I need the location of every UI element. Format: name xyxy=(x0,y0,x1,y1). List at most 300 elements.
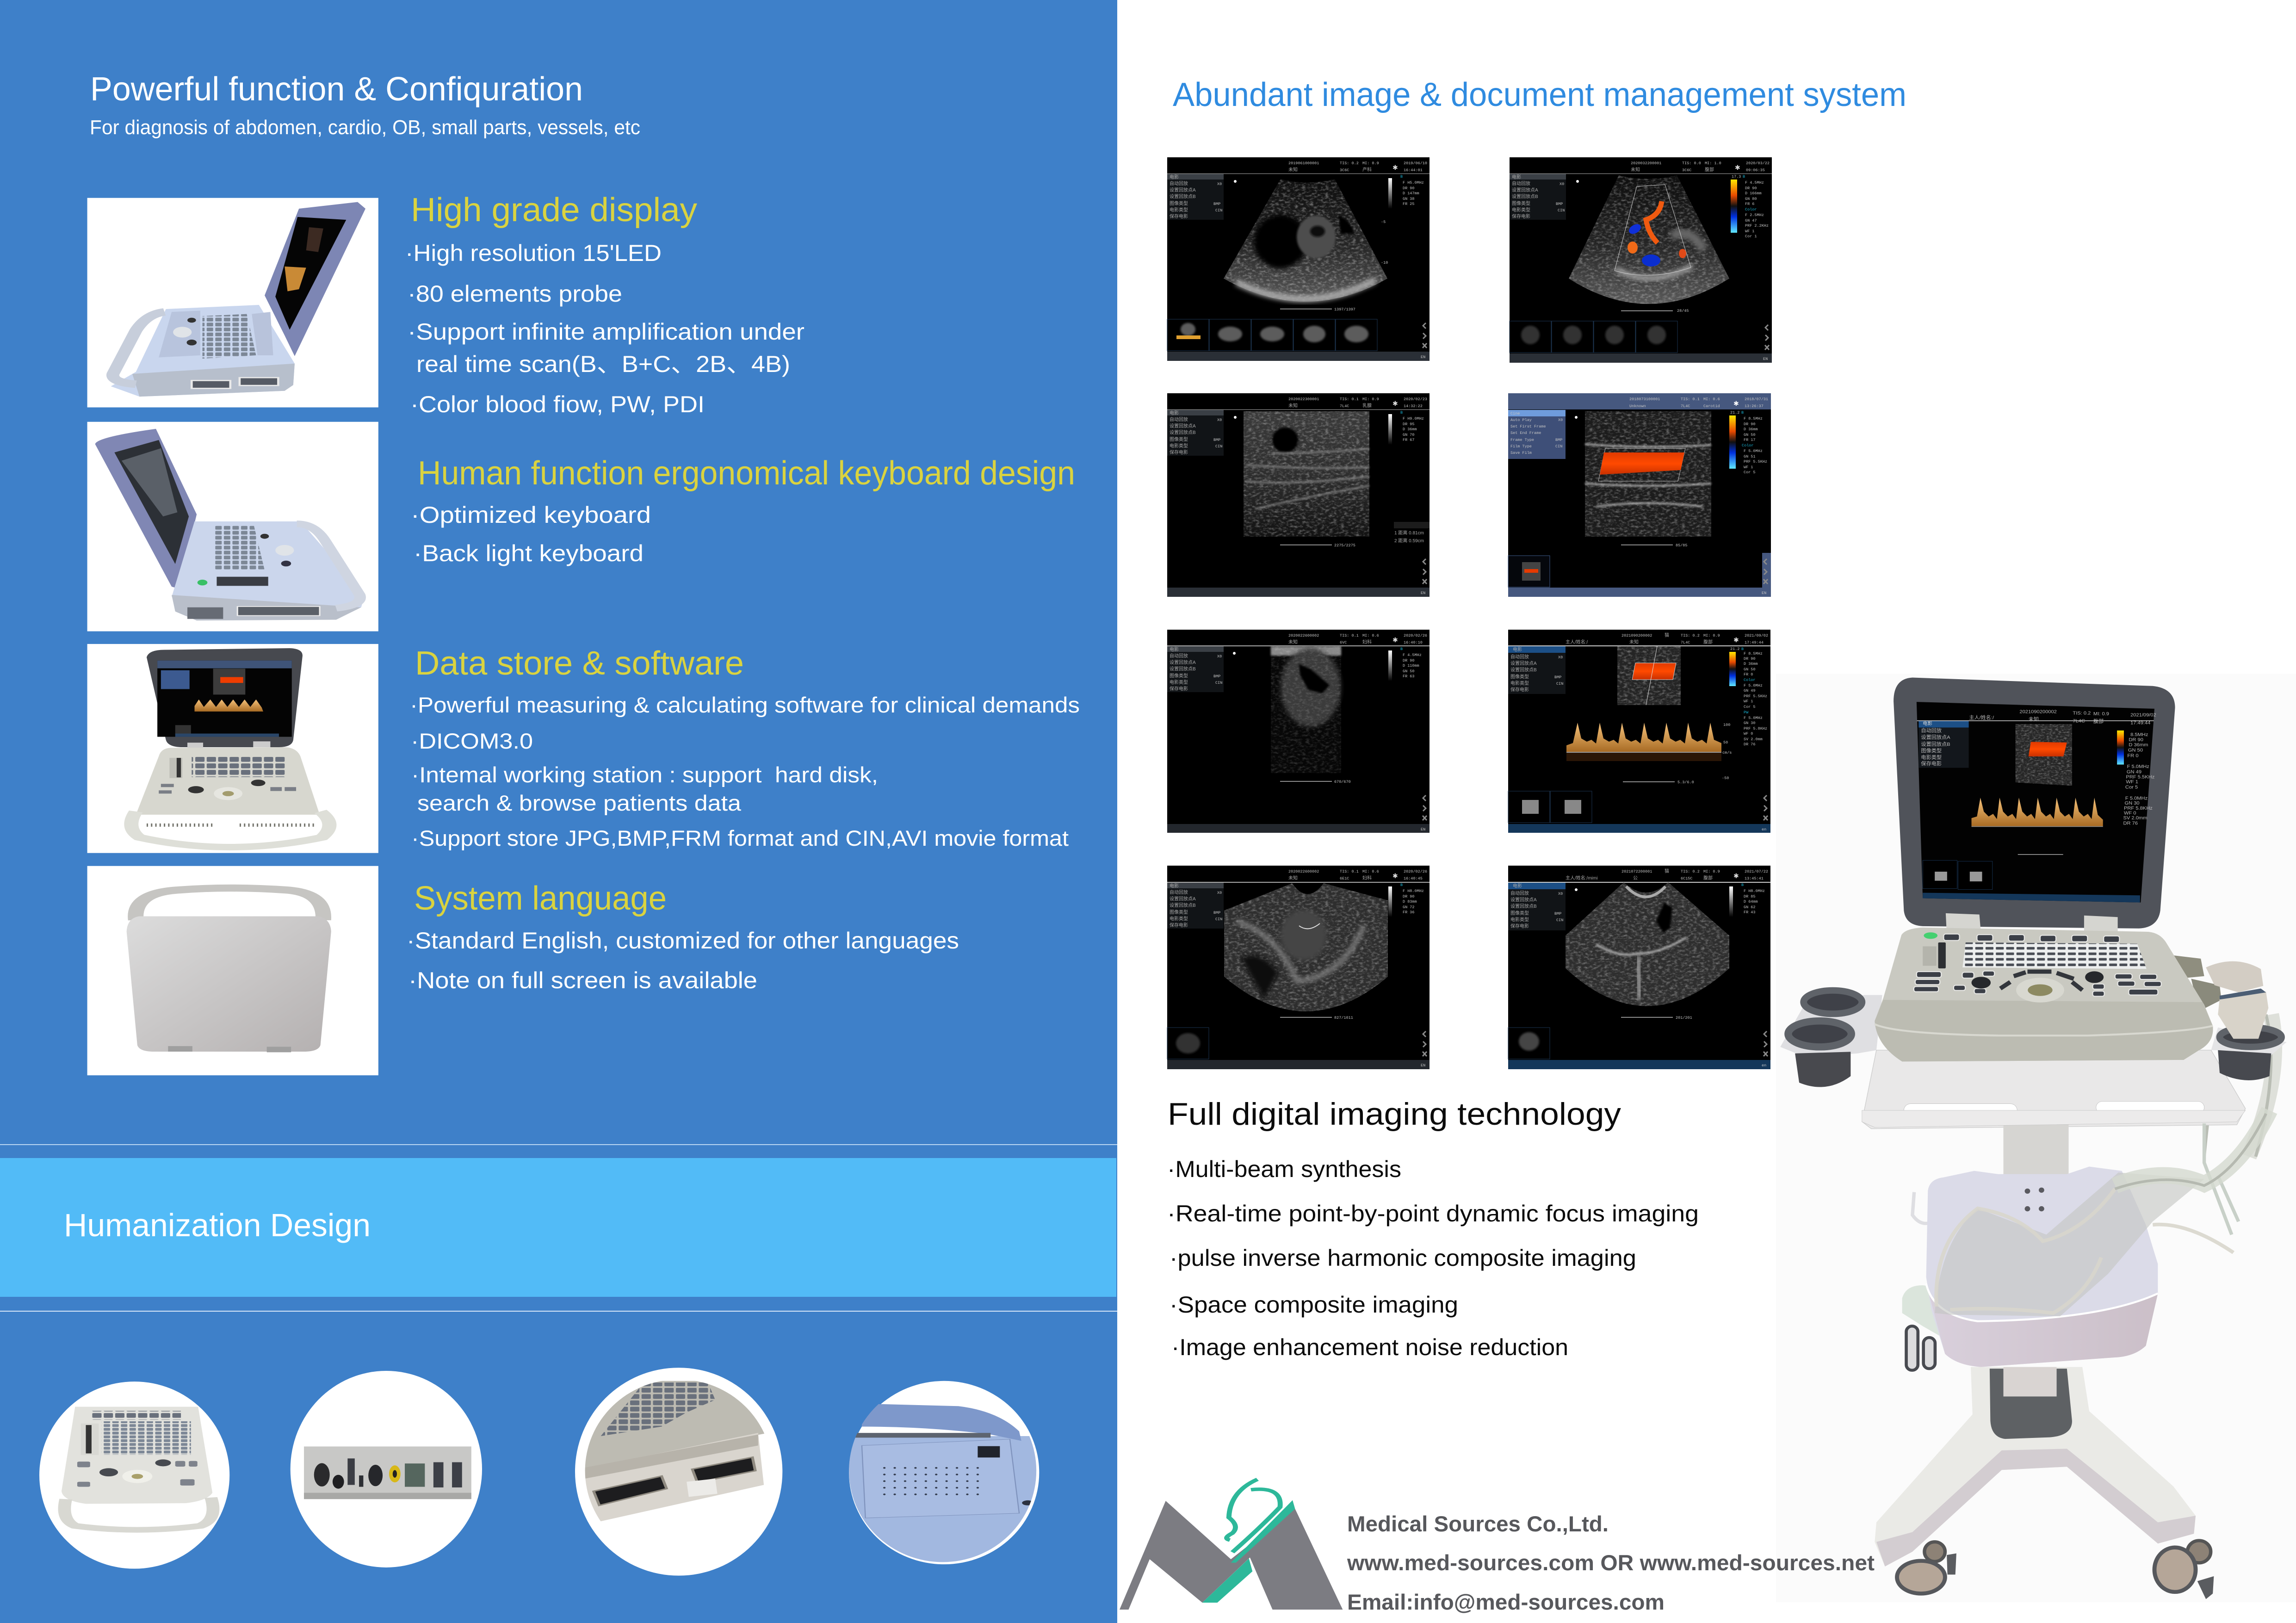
screenshot E: cyst linear: 16:40:10 xyxy=(1404,640,1423,645)
screenshot H: endocavity veterinary: BMP xyxy=(1554,911,1561,916)
screenshot B: colour doppler abdominal: Cor 1 xyxy=(1745,234,1757,239)
screenshot F: spectral doppler: BMP xyxy=(1554,675,1561,680)
screenshot C: breast linear: TIS: 0.1 xyxy=(1340,397,1359,402)
screenshot E: cyst linear xyxy=(1167,630,1430,833)
text block: imaging technology bullets: ·Real-time point-by-point dynamic focus imaging xyxy=(1167,1201,1699,1227)
screenshot C: breast linear: 1 距离 0.81cm xyxy=(1394,530,1424,536)
text block: imaging technology bullets xyxy=(1167,1156,1699,1360)
right probe cables xyxy=(2249,1015,2274,1157)
screenshot D: carotid colour: Cine xyxy=(1510,411,1520,416)
screenshot B: colour doppler abdominal: 3C6C xyxy=(1682,168,1691,173)
screenshot F: spectral doppler: B xyxy=(1741,647,1744,651)
screenshot D: carotid colour: BMP xyxy=(1555,438,1562,442)
screenshot D: carotid colour: Film Type xyxy=(1510,444,1532,449)
screenshot A: obstetric: 1397/1397 xyxy=(1334,307,1355,312)
screenshot G: endocavity: 2020022600002 xyxy=(1288,869,1319,874)
screenshot A: obstetric: 2019061000001 xyxy=(1288,161,1319,166)
screen xyxy=(1917,702,2154,903)
screenshot D: carotid colour: TIS: 0.1 xyxy=(1681,397,1700,402)
feet xyxy=(168,1046,192,1052)
screenshot H: endocavity veterinary: 猫 xyxy=(1665,868,1669,874)
screenshot D: carotid colour: Color xyxy=(1742,443,1754,448)
screenshot E: cyst linear: 设置回放点B xyxy=(1170,666,1196,672)
screenshot F: spectral doppler: cm/s xyxy=(1722,750,1732,755)
screenshot B: colour doppler abdominal: MI: 1.0 xyxy=(1705,161,1721,166)
trolley upper: monitor, console, holders, tray: 设置回放点A xyxy=(1921,734,1950,740)
rear wheels xyxy=(1925,1542,1945,1561)
trolley upper: monitor, console, holders, tray: PRF 5.8KHz xyxy=(2124,805,2153,811)
screenshot D: carotid colour: 21.2 xyxy=(1730,410,1739,415)
screenshot A: obstetric: B xyxy=(1400,174,1403,179)
screenshot H: endocavity veterinary: D 64mm xyxy=(1744,899,1758,904)
screenshot F: spectral doppler: 主人/姓名:/ xyxy=(1566,639,1588,645)
screenshot F: spectral doppler: DR 76 xyxy=(1744,742,1756,747)
screenshot E: cyst linear: 电影 xyxy=(1170,646,1179,652)
screenshot F: spectral doppler: -50 xyxy=(1722,776,1729,781)
screenshot H: endocavity veterinary: 电影类型 xyxy=(1510,917,1529,923)
panel: left blue column xyxy=(0,0,1117,1623)
monitor xyxy=(147,648,303,747)
company contact text: www.med-sources.com OR www.med-sources.net xyxy=(1347,1550,1875,1575)
trolley upper: monitor, console, holders, tray: 腹部 xyxy=(2093,718,2104,725)
knobs and trackball xyxy=(1972,977,1991,989)
screenshot C: breast linear: 乳腺 xyxy=(1362,403,1372,409)
rear cable frame xyxy=(2204,1123,2239,1235)
screenshot D: carotid colour: CIN xyxy=(1555,444,1562,449)
screenshot F: spectral doppler: PRF 5.5KHz xyxy=(1744,694,1767,699)
screenshot F: spectral doppler: 未知 xyxy=(1629,639,1639,645)
screenshot G: endocavity: 6E1C xyxy=(1340,876,1349,881)
screenshot F: spectral doppler: 17:49:44 xyxy=(1745,640,1764,645)
screenshot B: colour doppler abdominal: TIS: 0.0 xyxy=(1682,161,1701,166)
screenshot C: breast linear: 2275/2275 xyxy=(1334,543,1355,548)
gel cup right xyxy=(2218,1050,2271,1080)
screenshot G: endocavity: DR 90 xyxy=(1403,894,1415,899)
tray xyxy=(1862,1050,2246,1129)
screenshot A: obstetric xyxy=(1167,157,1430,361)
screenshot F: spectral doppler: 图像类型 xyxy=(1510,674,1529,680)
panel: ultrasound screenshots grid xyxy=(1167,157,1772,1069)
screenshot H: endocavity veterinary: 13:45:41 xyxy=(1745,876,1764,881)
screenshot D: carotid colour: GN 50 xyxy=(1744,433,1756,437)
screenshot F: spectral doppler: 2021090200002 xyxy=(1621,633,1652,638)
screenshot D: carotid colour: 13:26:37 xyxy=(1745,404,1764,409)
screenshot F: spectral doppler: TIS: 0.2 xyxy=(1681,633,1700,638)
screenshot E: cyst linear: DR 90 xyxy=(1403,658,1415,663)
screenshot C: breast linear: EN xyxy=(1421,591,1425,595)
screenshot F: spectral doppler: WF 0 xyxy=(1744,731,1753,736)
screenshot E: cyst linear: BMP xyxy=(1213,674,1220,679)
screenshot A: obstetric: -10 xyxy=(1381,260,1388,265)
screenshot D: carotid colour: Auto Play xyxy=(1510,418,1532,422)
trolley upper: monitor, console, holders, tray: PRF 5.5KHz xyxy=(2126,774,2154,780)
heading: High grade display: High grade display xyxy=(411,192,697,229)
screenshot B: colour doppler abdominal: 腹部 xyxy=(1705,167,1714,173)
screenshot D: carotid colour: Unknown xyxy=(1629,404,1646,409)
screenshot C: breast linear: 图像类型 xyxy=(1170,436,1188,442)
screenshot F: spectral doppler: MI: 0.9 xyxy=(1703,633,1720,638)
heading: Data store & software: Data store & software xyxy=(415,645,744,682)
screenshot E: cyst linear: D 110mm xyxy=(1403,663,1419,668)
screenshot A: obstetric: GN 38 xyxy=(1403,197,1415,201)
screenshot H: endocavity veterinary: 主人/姓名:/mimi xyxy=(1566,875,1597,881)
screenshot F: spectral doppler: 50 xyxy=(1723,740,1728,745)
trolley upper: monitor, console, holders, tray: Cor 5 xyxy=(2125,785,2138,790)
base xyxy=(111,305,295,396)
connectors xyxy=(2173,955,2204,978)
screenshot C: breast linear: MI: 0.9 xyxy=(1362,397,1379,402)
screenshot G: endocavity: ✱ xyxy=(1392,872,1398,880)
screen lid xyxy=(265,202,365,356)
connector ports xyxy=(192,380,230,388)
sliders xyxy=(1923,946,1937,966)
screenshot C: breast linear: 电影类型 xyxy=(1170,443,1188,449)
screenshot E: cyst linear: 670/670 xyxy=(1334,780,1351,784)
cables in plastic wrap xyxy=(1936,1189,2234,1313)
screenshot F: spectral doppler: 2021/09/02 xyxy=(1745,633,1768,638)
trolley upper: monitor, console, holders, tray: SV 2.0mm xyxy=(2123,815,2147,821)
screenshot A: obstetric: 电影类型 xyxy=(1170,207,1188,213)
screenshot H: endocavity veterinary: CIN xyxy=(1556,918,1563,923)
screenshot G: endocavity: MI: 0.6 xyxy=(1362,869,1379,874)
tray underside xyxy=(1862,1110,2246,1127)
screenshot C: breast linear: 自动回放 xyxy=(1170,416,1188,422)
screenshot H: endocavity veterinary: 腹部 xyxy=(1703,875,1713,881)
text block: data bullets: ·Powerful measuring & calculating software for clinical demands xyxy=(410,693,1080,717)
detail photo: rear port panel circle xyxy=(291,1371,482,1567)
trolley upper: monitor, console, holders, tray: 设置回放点B xyxy=(1921,741,1950,747)
screenshot F: spectral doppler: F 5.0MHz xyxy=(1744,683,1763,688)
screenshot A: obstetric: DR 90 xyxy=(1403,186,1415,191)
screenshot G: endocavity xyxy=(1167,866,1430,1069)
screenshot H: endocavity veterinary: 2021072200001 xyxy=(1621,869,1652,874)
screenshot B: colour doppler abdominal: 28/45 xyxy=(1677,309,1689,313)
screenshot F: spectral doppler: X0 xyxy=(1558,655,1563,660)
screenshot G: endocavity: B xyxy=(1400,883,1403,887)
screen lid xyxy=(95,429,197,589)
handle xyxy=(136,888,323,920)
screenshot F: spectral doppler: 设置回放点A xyxy=(1510,660,1537,666)
detail photo: back panel circle xyxy=(848,1381,1040,1565)
detail photo: keyboard circle xyxy=(39,1381,229,1569)
screenshot F: spectral doppler: PRF 5.8KHz xyxy=(1744,726,1767,731)
screenshot B: colour doppler abdominal: 电影类型 xyxy=(1512,207,1530,213)
product photo 2: open laptop ultrasound, opposite side xyxy=(87,422,378,632)
screenshot A: obstetric: F H5.0MHz xyxy=(1403,180,1424,185)
screenshot D: carotid colour: Set End Frame xyxy=(1510,431,1541,435)
text block: data bullets: ·DICOM3.0 xyxy=(411,729,533,753)
handle xyxy=(297,524,360,608)
screenshot G: endocavity: 设置回放点A xyxy=(1170,896,1196,902)
text block: display bullets: ·Support infinite amplification under xyxy=(408,319,805,345)
screenshot F: spectral doppler: GN 49 xyxy=(1744,688,1756,693)
screenshot A: obstetric: 产科 xyxy=(1362,167,1372,173)
hook xyxy=(1912,1192,1928,1223)
text block: keyboard bullets xyxy=(411,502,651,566)
screenshot D: carotid colour: Carotid xyxy=(1703,404,1720,409)
trolley upper: monitor, console, holders, tray: 自动回放 xyxy=(1921,727,1942,733)
screenshot G: endocavity: 设置回放点B xyxy=(1170,902,1196,908)
screenshot F: spectral doppler: en xyxy=(1762,827,1766,832)
screenshot E: cyst linear: X0 xyxy=(1217,654,1222,659)
screenshot F: spectral doppler: Cor 5 xyxy=(1744,705,1756,709)
screenshot D: carotid colour: FR 17 xyxy=(1744,438,1756,442)
heading: System language: System language xyxy=(414,880,667,917)
column xyxy=(2004,1128,2069,1157)
screenshot E: cyst linear: 图像类型 xyxy=(1170,673,1188,679)
screenshot F: spectral doppler: 电影类型 xyxy=(1510,680,1529,686)
screenshot A: obstetric: 设置回放点A xyxy=(1170,187,1196,193)
screenshot B: colour doppler abdominal: D 166mm xyxy=(1745,191,1762,196)
screenshot A: obstetric: 图像类型 xyxy=(1170,200,1188,206)
screenshot B: colour doppler abdominal: GN 47 xyxy=(1745,218,1757,223)
screenshot G: endocavity: 电影类型 xyxy=(1170,916,1188,922)
trolley upper: monitor, console, holders, tray: WF 0 xyxy=(2124,811,2136,816)
screenshot G: endocavity: 保存电影 xyxy=(1170,922,1188,928)
text block: data bullets: ·Support store JPG,BMP,FRM format and CIN,AVI movie format xyxy=(411,826,1069,850)
screenshot G: endocavity: FR 36 xyxy=(1403,910,1415,915)
screenshot H: endocavity veterinary: F H8.0MHz xyxy=(1744,889,1765,893)
screenshot F: spectral doppler: WF 1 xyxy=(1744,699,1753,704)
screenshot F: spectral doppler: CIN xyxy=(1556,681,1563,686)
screenshot F: spectral doppler: 100 xyxy=(1723,723,1730,727)
screenshot C: breast linear: ✱ xyxy=(1392,400,1398,407)
screenshot D: carotid colour: 2018/07/31 xyxy=(1745,397,1768,402)
screenshot E: cyst linear: 保存电影 xyxy=(1170,686,1188,692)
trolley upper: monitor, console, holders, tray: 保存电影 xyxy=(1921,760,1942,767)
trolley upper: monitor, console, holders, tray: GN 50 xyxy=(2128,748,2143,753)
trolley upper: monitor, console, holders, tray: 7L4C xyxy=(2073,719,2085,724)
foot rest and caster xyxy=(1902,1285,1940,1336)
screenshot F: spectral doppler: D 36mm xyxy=(1744,662,1758,666)
screenshot G: endocavity: 电影 xyxy=(1170,883,1179,889)
screenshot F: spectral doppler: 设置回放点B xyxy=(1510,667,1537,673)
screenshot F: spectral doppler: PW xyxy=(1744,710,1749,715)
screenshot B: colour doppler abdominal: 2020032200001 xyxy=(1631,161,1661,166)
subtitle: For diagnosis of abdomen, cardio, OB, small parts, vessels, etc xyxy=(90,116,640,139)
banner: Humanization Design: Humanization Design xyxy=(64,1207,371,1243)
text block: language bullets: ·Note on full screen is available xyxy=(408,967,757,993)
screenshot D: carotid colour: 2018073100001 xyxy=(1629,397,1660,402)
screenshot B: colour doppler abdominal: X0 xyxy=(1560,182,1564,186)
trolley upper: monitor, console, holders, tray: MI: 0.9 xyxy=(2093,711,2109,717)
screenshot D: carotid colour xyxy=(1508,393,1771,597)
base xyxy=(172,521,365,607)
screenshot B: colour doppler abdominal: 图像类型 xyxy=(1512,200,1530,206)
trolley upper: monitor, console, holders, tray: WF 1 xyxy=(2126,779,2138,785)
screenshot E: cyst linear: FR 63 xyxy=(1403,674,1415,679)
product photo 3: front view with screen xyxy=(87,644,378,853)
screenshot F: spectral doppler xyxy=(1508,630,1770,833)
screenshot H: endocavity veterinary: 201/201 xyxy=(1676,1016,1692,1020)
screenshot B: colour doppler abdominal: 09:06:35 xyxy=(1746,168,1765,173)
screenshot E: cyst linear: B xyxy=(1400,647,1403,651)
screenshot B: colour doppler abdominal: Color xyxy=(1745,207,1757,212)
screenshot G: endocavity: 未知 xyxy=(1288,875,1298,881)
screenshot D: carotid colour: F 8.5MHz xyxy=(1744,416,1763,421)
screenshot E: cyst linear: MI: 0.6 xyxy=(1362,633,1379,638)
screenshot G: endocavity: X0 xyxy=(1217,891,1222,895)
screenshot D: carotid colour: Frame Type xyxy=(1510,438,1534,442)
screenshot F: spectral doppler: F 5.0MHz xyxy=(1744,716,1763,720)
screenshot A: obstetric: MI: 0.9 xyxy=(1362,161,1379,166)
screenshot G: endocavity: 2020/02/26 xyxy=(1404,869,1427,874)
connector left xyxy=(594,1476,667,1505)
screenshot C: breast linear: D 36mm xyxy=(1403,427,1417,432)
trolley upper: monitor, console, holders, tray: 电影 xyxy=(1923,720,1932,726)
trolley upper: monitor, console, holders, tray: D 36mm xyxy=(2129,743,2148,748)
screenshot H: endocavity veterinary: en xyxy=(1762,1063,1766,1068)
screenshot B: colour doppler abdominal: 17.3 xyxy=(1732,174,1741,179)
screenshot A: obstetric: 电影 xyxy=(1170,174,1179,180)
speaker panel xyxy=(862,1439,1019,1518)
screenshot E: cyst linear: EN xyxy=(1421,827,1425,832)
heading: Human function ergonomical keyboard design: Human function ergonomical keyboard design xyxy=(418,455,1075,492)
screenshot E: cyst linear: F 4.5MHz xyxy=(1403,653,1422,657)
screenshot D: carotid colour: 7L4C xyxy=(1681,404,1690,409)
screenshot B: colour doppler abdominal: F 4.5MHz xyxy=(1745,180,1764,185)
screenshot B: colour doppler abdominal: 自动回放 xyxy=(1512,180,1530,186)
screenshot D: carotid colour: X0 xyxy=(1558,418,1563,422)
screenshot D: carotid colour: Cor 5 xyxy=(1744,470,1756,475)
screenshot B: colour doppler abdominal: BMP xyxy=(1556,202,1563,206)
trolley upper: monitor, console, holders, tray: FR 0 xyxy=(2127,753,2139,758)
trolley upper: monitor, console, holders, tray: 8.5MHz xyxy=(2130,732,2148,737)
column xyxy=(2004,1110,2069,1176)
screenshot A: obstetric: -5 xyxy=(1381,220,1386,224)
screenshot B: colour doppler abdominal: FR 6 xyxy=(1745,202,1754,206)
screenshot A: obstetric: 未知 xyxy=(1288,167,1298,173)
screenshot F: spectral doppler: F 8.5MHz xyxy=(1744,651,1763,656)
screenshot E: cyst linear: 电影类型 xyxy=(1170,679,1188,685)
trolley upper: monitor, console, holders, tray: GN 30 xyxy=(2124,800,2140,806)
banner: Humanization Design xyxy=(0,1158,1116,1297)
screenshot C: breast linear: 保存电影 xyxy=(1170,449,1188,455)
trolley upper: monitor, console, holders, tray: 未知 xyxy=(2029,716,2039,722)
trolley upper: monitor, console, holders, tray: 主人/姓名:/ xyxy=(1969,714,1994,720)
trolley upper: monitor, console, holders, tray: F 5.0MHz xyxy=(2125,796,2147,801)
company contact text xyxy=(1347,1511,1875,1614)
screenshot H: endocavity veterinary xyxy=(1508,866,1770,1069)
text block: imaging technology bullets: ·Image enhancement noise reduction xyxy=(1171,1334,1568,1360)
screenshot D: carotid colour: EN xyxy=(1762,591,1766,595)
screenshot C: breast linear: 设置回放点B xyxy=(1170,429,1196,435)
text block: imaging technology bullets: ·Multi-beam synthesis xyxy=(1167,1156,1401,1182)
trolley upper: monitor, console, holders, tray xyxy=(1780,678,2287,1157)
screenshot C: breast linear: 14:32:22 xyxy=(1404,404,1423,409)
tray slots xyxy=(1904,1104,2017,1117)
text block: data bullets: search & browse patients data xyxy=(417,791,742,815)
screenshot E: cyst linear: 妇科 xyxy=(1362,639,1372,645)
detail photo: probe connectors circle xyxy=(575,1368,782,1576)
rear ports xyxy=(187,607,223,619)
screenshot B: colour doppler abdominal xyxy=(1510,157,1772,363)
screenshot B: colour doppler abdominal: 设置回放点B xyxy=(1512,193,1538,199)
text block: keyboard bullets: ·Optimized keyboard xyxy=(411,502,651,528)
product photo 1: open laptop ultrasound, side view xyxy=(87,198,378,407)
screenshot D: carotid colour: Set First Frame xyxy=(1510,424,1546,429)
case body xyxy=(127,916,331,1052)
logo: Medical Sources mark xyxy=(1120,1479,1343,1610)
screenshot F: spectral doppler: GN 30 xyxy=(1744,721,1756,725)
screenshot G: endocavity: D 83mm xyxy=(1403,899,1417,904)
screenshot F: spectral doppler: 腹部 xyxy=(1703,639,1713,645)
screenshot H: endocavity veterinary: TIS: 0.2 xyxy=(1681,869,1700,874)
monitor xyxy=(1894,678,2175,929)
screenshot H: endocavity veterinary: 6C15C xyxy=(1681,876,1693,881)
screenshot F: spectral doppler: FR 0 xyxy=(1744,672,1753,677)
text block: imaging technology bullets: ·pulse inverse harmonic composite imaging xyxy=(1170,1245,1636,1271)
gel holder arm left xyxy=(1780,995,1882,1057)
screenshot A: obstetric: 保存电影 xyxy=(1170,213,1188,219)
trolley upper: monitor, console, holders, tray: 17:49:44 xyxy=(2130,720,2150,725)
screenshot A: obstetric: 3C6C xyxy=(1340,168,1349,173)
text block: display bullets: ·Color blood fiow, PW, PDI xyxy=(410,391,705,417)
screenshot E: cyst linear: 设置回放点A xyxy=(1170,659,1196,665)
screenshot B: colour doppler abdominal: 设置回放点A xyxy=(1512,187,1538,193)
screenshot H: endocavity veterinary: 电影 xyxy=(1513,883,1522,889)
screenshot B: colour doppler abdominal: CIN xyxy=(1558,208,1565,213)
screenshot D: carotid colour: Save Film xyxy=(1510,451,1532,455)
screenshot A: obstetric: D 147mm xyxy=(1403,191,1419,196)
screenshot F: spectral doppler: GN 50 xyxy=(1744,667,1756,672)
trolley upper: monitor, console, holders, tray: 图像类型 xyxy=(1921,747,1942,754)
front right wheel xyxy=(2154,1548,2196,1592)
screenshot C: breast linear: F H9.0MHz xyxy=(1403,416,1424,421)
screenshot H: endocavity veterinary: ✱ xyxy=(1733,872,1739,880)
screenshot E: cyst linear: GN 50 xyxy=(1403,669,1415,674)
screenshot C: breast linear: DR 95 xyxy=(1403,422,1415,427)
pedal plate xyxy=(1990,1369,2072,1439)
screenshot E: cyst linear: 2020022600002 xyxy=(1288,633,1319,638)
text block: language bullets xyxy=(407,928,959,993)
screenshot H: endocavity veterinary: B xyxy=(1741,883,1744,887)
screenshot D: carotid colour: GN 51 xyxy=(1744,454,1756,459)
bolts xyxy=(2025,1188,2044,1211)
screenshot D: carotid colour: MI: 0.6 xyxy=(1703,397,1720,402)
screenshot C: breast linear: 7L4C xyxy=(1340,404,1349,409)
screenshot A: obstetric: 2019/06/10 xyxy=(1404,161,1427,166)
screenshot C: breast linear: GN 70 xyxy=(1403,433,1415,437)
screenshot C: breast linear xyxy=(1167,393,1430,597)
screenshot C: breast linear: B xyxy=(1400,410,1403,415)
screenshot B: colour doppler abdominal: GN 80 xyxy=(1745,197,1757,201)
connector right xyxy=(693,1457,755,1482)
text block: language bullets: ·Standard English, customized for other languages xyxy=(407,928,959,954)
screenshot C: breast linear: 2 距离 0.59cm xyxy=(1394,538,1424,544)
screenshot B: colour doppler abdominal: ✱ xyxy=(1735,164,1740,171)
screenshot H: endocavity veterinary: DR 85 xyxy=(1744,894,1756,899)
gel holder arm right xyxy=(2211,1028,2287,1057)
screenshot H: endocavity veterinary: FR 43 xyxy=(1744,910,1756,915)
gel cup left xyxy=(1795,1052,1850,1087)
text block: display bullets: ·High resolution 15'LED xyxy=(405,240,662,266)
screenshot G: endocavity: 827/1011 xyxy=(1334,1016,1353,1020)
hinges xyxy=(187,743,203,748)
text block: display bullets: ·80 elements probe xyxy=(408,281,622,307)
screenshot D: carotid colour: F 5.0MHz xyxy=(1744,449,1763,453)
screenshot A: obstetric: FR 25 xyxy=(1403,202,1415,206)
front left wheel xyxy=(1897,1561,1945,1593)
keyboard keys xyxy=(1962,942,2147,969)
heading: Abundant image & document management system: Abundant image & document management system xyxy=(1173,76,1906,113)
power button xyxy=(1924,932,1937,939)
handle xyxy=(113,312,165,384)
screenshot G: endocavity: F H8.0MHz xyxy=(1403,889,1424,893)
screenshot G: endocavity: 图像类型 xyxy=(1170,909,1188,915)
screenshot A: obstetric: TIS: 0.2 xyxy=(1340,161,1359,166)
screenshot B: colour doppler abdominal: EN xyxy=(1763,357,1768,361)
